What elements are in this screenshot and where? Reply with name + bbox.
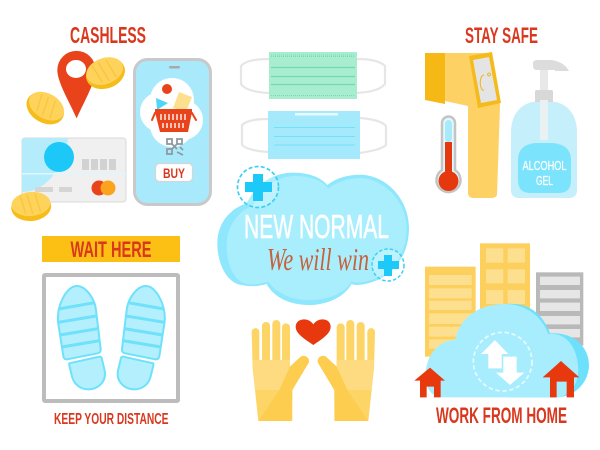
icon: map pin — [57, 51, 96, 118]
panel: stay safe — [425, 23, 577, 198]
caption: keep your distance: KEEP YOUR DISTANCE — [54, 411, 168, 428]
icon: cloud — [426, 304, 589, 397]
panel: work from home — [414, 243, 589, 428]
icon: plus badge bottom — [372, 249, 404, 281]
QR code — [167, 139, 183, 155]
icon: download arrow — [496, 357, 524, 385]
cloud shape — [217, 173, 409, 305]
left footprint — [58, 286, 105, 389]
icon: right glove — [318, 320, 375, 421]
icon: coin top — [81, 52, 129, 94]
icon: blue mask — [242, 111, 386, 159]
icon: footprints — [58, 286, 165, 389]
icon: coin left — [21, 85, 70, 131]
panel: new normal cloud — [217, 166, 409, 305]
icon: right building — [536, 272, 583, 346]
icon: middle building — [480, 243, 530, 320]
icon: right house — [543, 361, 579, 397]
panel: wait here — [42, 236, 180, 428]
icon: left house — [414, 368, 445, 397]
icon: left building — [425, 267, 476, 357]
buy button: BUY — [163, 165, 185, 181]
icon: left glove — [252, 320, 309, 421]
shopping illustration — [140, 78, 203, 147]
panel: gloves and heart — [252, 319, 375, 421]
bottle label second line: GEL — [536, 173, 553, 188]
right footprint — [118, 286, 165, 389]
icon: alcohol gel bottle — [511, 60, 577, 198]
icon: heart — [296, 319, 331, 345]
credit card — [22, 138, 126, 202]
icon: plus badge top — [238, 166, 278, 208]
floor square — [44, 275, 178, 401]
panel: cashless — [10, 22, 210, 223]
title: new normal: NEW NORMAL — [244, 208, 389, 245]
subtitle: we will win: We will win — [267, 241, 369, 277]
icon: upload arrow — [481, 340, 508, 368]
heading: cashless: CASHLESS — [70, 22, 146, 48]
icon: infrared thermometer — [425, 52, 501, 198]
banner: wait here: WAIT HERE — [70, 237, 152, 262]
icon: green mask — [241, 52, 385, 99]
panel: face masks — [241, 52, 386, 159]
icon: coin bottom — [10, 190, 52, 223]
icon: mercury thermometer — [436, 117, 460, 192]
bottle label: ALCOHOL — [522, 158, 566, 173]
smartphone — [134, 60, 210, 204]
heading: stay safe: STAY SAFE — [465, 23, 538, 48]
